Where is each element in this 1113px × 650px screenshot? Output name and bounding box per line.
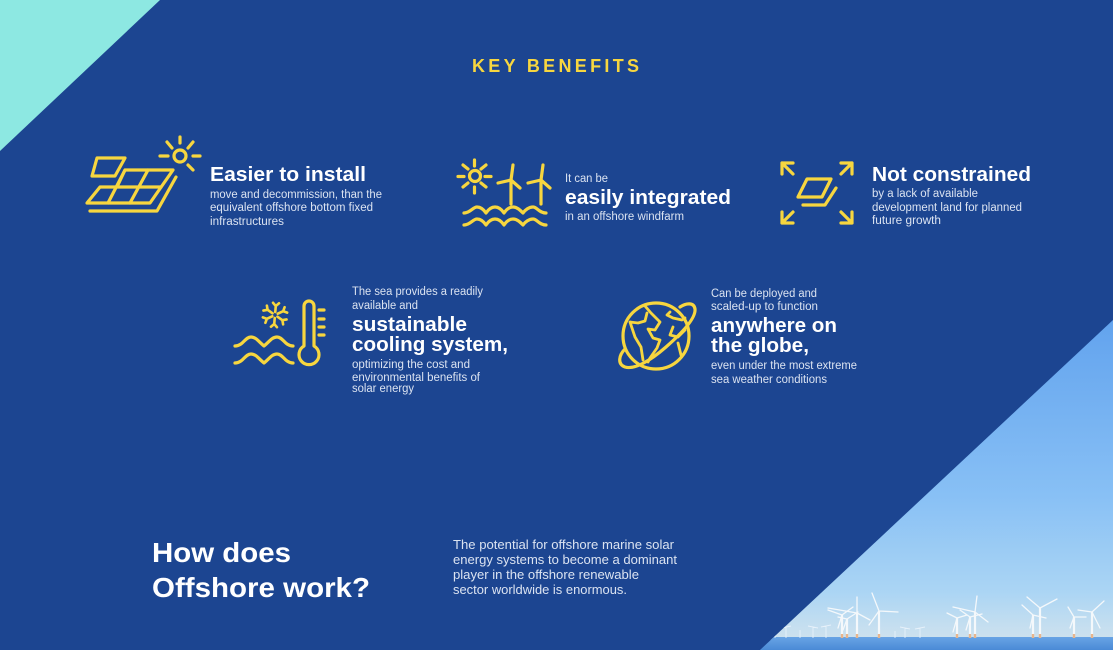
description: move and decommission, than the <box>210 189 382 201</box>
heading: cooling system, <box>352 334 508 356</box>
description: by a lack of available <box>872 188 978 200</box>
heading: Easier to install <box>210 164 366 186</box>
description: solar energy <box>352 383 414 395</box>
heading: anywhere on <box>711 315 837 337</box>
description: future growth <box>872 215 941 227</box>
benefit: not constrained <box>782 163 1031 227</box>
icon: snowflake, thermometer and waves <box>235 301 324 365</box>
paragraph: offshore potential: sector worldwide is enormous. <box>453 582 627 597</box>
description: environmental benefits of <box>352 372 481 384</box>
description: in an offshore windfarm <box>565 211 684 223</box>
description <box>210 189 382 228</box>
icon: expanding land plot <box>782 163 852 223</box>
photo: offshore wind farm <box>760 320 1113 650</box>
description <box>352 359 481 395</box>
description: development land for planned <box>872 202 1022 214</box>
description <box>711 360 857 386</box>
title: KEY BENEFITS <box>472 56 639 76</box>
description <box>872 188 1022 227</box>
lead-in <box>711 288 818 313</box>
description: even under the most extreme <box>711 360 857 372</box>
paragraph: offshore potential: The potential for offshore marine solar <box>453 537 675 552</box>
heading: how does offshore work: Offshore work? <box>152 572 370 603</box>
heading: sustainable <box>352 314 467 336</box>
benefit: anywhere on the globe <box>620 288 857 386</box>
heading: the globe, <box>711 335 809 357</box>
benefit: easily integrated <box>458 160 731 225</box>
heading: how does offshore work <box>152 537 370 603</box>
paragraph: offshore potential: energy systems to become a dominant <box>453 552 677 567</box>
lead-in <box>352 286 483 312</box>
heading <box>352 314 508 356</box>
icon: solar panel and sun <box>87 137 200 211</box>
icon: globe with orbit <box>620 303 695 369</box>
heading: easily integrated <box>565 187 731 209</box>
paragraph: offshore potential <box>453 537 677 597</box>
heading <box>711 315 837 357</box>
description: optimizing the cost and <box>352 359 470 371</box>
benefit: sustainable cooling system <box>235 286 508 395</box>
benefit: easier to install <box>87 137 382 228</box>
description: equivalent offshore bottom fixed <box>210 202 373 214</box>
lead-in: The sea provides a readily <box>352 286 483 298</box>
description: sea weather conditions <box>711 374 827 386</box>
lead-in: Can be deployed and <box>711 288 817 300</box>
lead-in: scaled-up to function <box>711 301 818 313</box>
heading: Not constrained <box>872 164 1031 186</box>
heading: how does offshore work: How does <box>152 537 291 568</box>
description: infrastructures <box>210 216 284 228</box>
corner triangle: top left <box>0 0 160 151</box>
icon: sun, wind turbines and waves <box>458 160 550 225</box>
lead-in: available and <box>352 300 418 312</box>
paragraph: offshore potential: player in the offshore renewable <box>453 567 639 582</box>
lead-in: It can be <box>565 173 608 185</box>
